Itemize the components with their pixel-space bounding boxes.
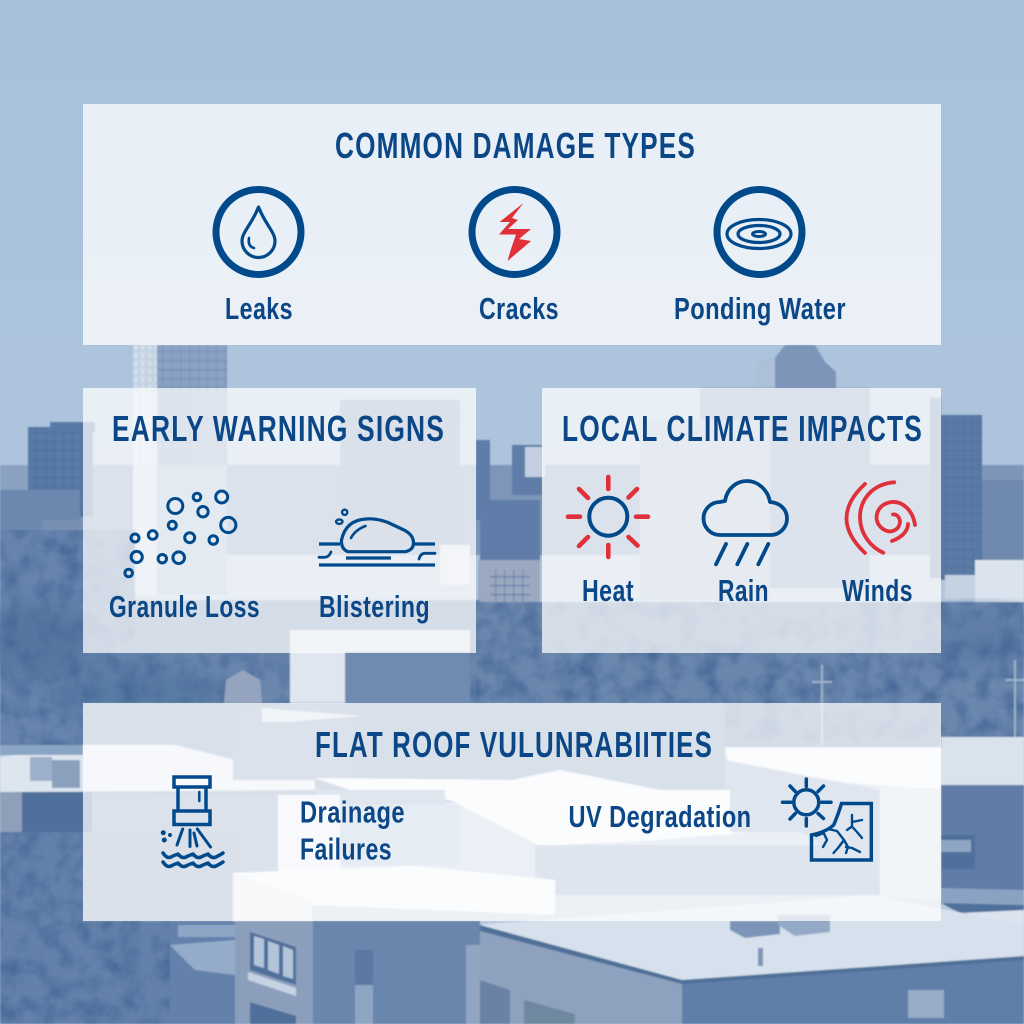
icon: failing drain: [161, 777, 223, 867]
front-right building: [480, 895, 1024, 980]
left trees: [0, 832, 235, 1024]
icon: sun: [568, 477, 648, 557]
label: winds: Winds: [842, 573, 913, 608]
label: blistering: Blistering: [319, 589, 430, 624]
roofs behind the lower panel: [315, 770, 750, 846]
label: heat: Heat: [582, 573, 634, 608]
label: leaks: Leaks: [225, 291, 293, 326]
icon: water drop in ring: [216, 190, 301, 274]
heading: early warning signs: EARLY WARNING SIGNS: [112, 408, 445, 449]
icon: rain cloud: [704, 481, 787, 564]
label: drainage failures: Failures: [300, 832, 392, 866]
panel: local climate impacts: [542, 388, 941, 653]
label: drainage failures: [300, 794, 405, 866]
icon: wind swirl: [846, 482, 915, 553]
label: granule loss: Granule Loss: [109, 589, 260, 624]
icon: sun over cracked membrane: [782, 779, 871, 860]
panel: flat roof vulnerabilities: [83, 703, 941, 921]
heading: flat roof vulnerabilities: FLAT ROOF VULUNRABIITIES: [315, 724, 713, 765]
label: rain: Rain: [718, 573, 769, 608]
panel: early warning signs: [83, 388, 476, 653]
tree belt: [0, 530, 135, 750]
label: cracks: Cracks: [479, 291, 559, 326]
heading: common damage types: COMMON DAMAGE TYPES: [335, 125, 696, 166]
label: drainage failures: Drainage: [300, 794, 405, 830]
mid-ground: left side behind the lower panel: [83, 703, 725, 803]
icon: crack bolt in ring: [472, 190, 557, 274]
label: uv degradation: UV Degradation: [568, 799, 752, 834]
icon: roof blister: [319, 510, 435, 565]
front-left building: [233, 866, 555, 921]
panel: common damage types: [83, 104, 941, 345]
label: ponding water: Ponding Water: [674, 291, 846, 326]
icon: ponding ripples in ring: [717, 190, 802, 274]
icon: granule loss circles: [125, 491, 236, 577]
